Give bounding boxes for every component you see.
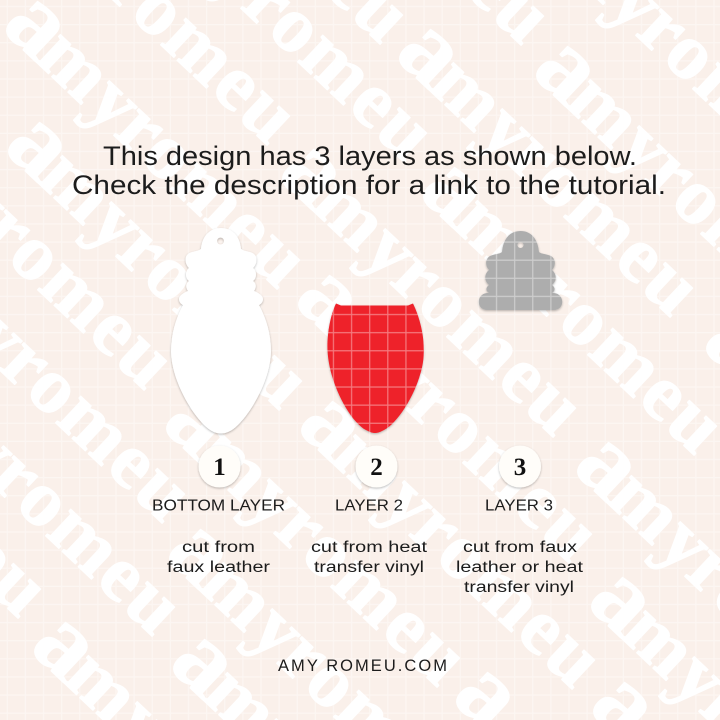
description 3: cut from faux [463, 539, 577, 556]
number badge 3 [499, 446, 541, 488]
background watermark pattern: a [13, 584, 127, 701]
background watermark pattern: my [414, 37, 555, 177]
background watermark pattern: my [23, 130, 164, 270]
background watermark pattern: romeu [102, 204, 330, 426]
column 1: bottom layer [152, 446, 285, 576]
description 2: cut from heat [311, 539, 428, 556]
heading: Check the description for a link to the tutorial. [72, 170, 666, 200]
background watermark pattern: a [515, 8, 629, 125]
label: bottom layer: BOTTOM LAYER [152, 498, 285, 514]
description 3: leather or heat [456, 559, 584, 576]
background watermark pattern: my [21, 9, 162, 149]
heading: This design has 3 layers as shown below. [103, 141, 637, 171]
heading [72, 141, 666, 200]
background watermark pattern: romeu [100, 83, 328, 305]
layer 1 shape: white bottom layer [171, 228, 271, 434]
description 3: transfer vinyl [464, 579, 574, 596]
background watermark pattern: romeu [395, 483, 623, 705]
number badge 3: 3 [514, 454, 526, 481]
background watermark pattern: a [261, 111, 375, 228]
background watermark pattern: my [297, 157, 438, 297]
background watermark pattern: romeu [260, 481, 488, 703]
background watermark pattern: my [316, 409, 457, 549]
background watermark pattern: a [148, 491, 262, 608]
description 2: transfer vinyl [314, 559, 424, 576]
label: layer 3: LAYER 3 [485, 498, 553, 514]
background watermark pattern: a [402, 129, 516, 246]
background watermark pattern: a [280, 363, 394, 480]
label: layer 2: LAYER 2 [335, 498, 403, 514]
footer website: AMY ROMEU.COM [278, 657, 447, 675]
background watermark pattern: romeu [392, 357, 620, 579]
description 1: faux leather [167, 559, 270, 576]
layer 2 shape: red body [327, 304, 424, 433]
column 2: layer 2 [311, 446, 428, 576]
background watermark pattern: romeu [376, 231, 604, 453]
description 2 [311, 539, 428, 576]
background watermark pattern: a [277, 237, 391, 354]
background watermark pattern: a [556, 404, 670, 521]
background watermark pattern: my [181, 407, 322, 547]
description 1: cut from [182, 539, 255, 556]
background watermark pattern: my [551, 54, 692, 194]
background watermark pattern: my [438, 175, 579, 315]
description 1 [167, 539, 270, 576]
column 3: layer 3 [456, 446, 584, 596]
description 3 [456, 539, 584, 596]
background watermark pattern: romeu [493, 111, 720, 333]
number badge 2: 2 [370, 454, 383, 481]
background watermark pattern: a [570, 539, 684, 656]
number badge 1: 1 [213, 454, 226, 481]
background watermark pattern: a [145, 361, 259, 478]
layer 3 shape: grey cap [479, 231, 562, 310]
background watermark pattern: a [152, 601, 266, 718]
background watermark pattern: my [184, 537, 325, 677]
background watermark pattern: my [313, 283, 454, 423]
